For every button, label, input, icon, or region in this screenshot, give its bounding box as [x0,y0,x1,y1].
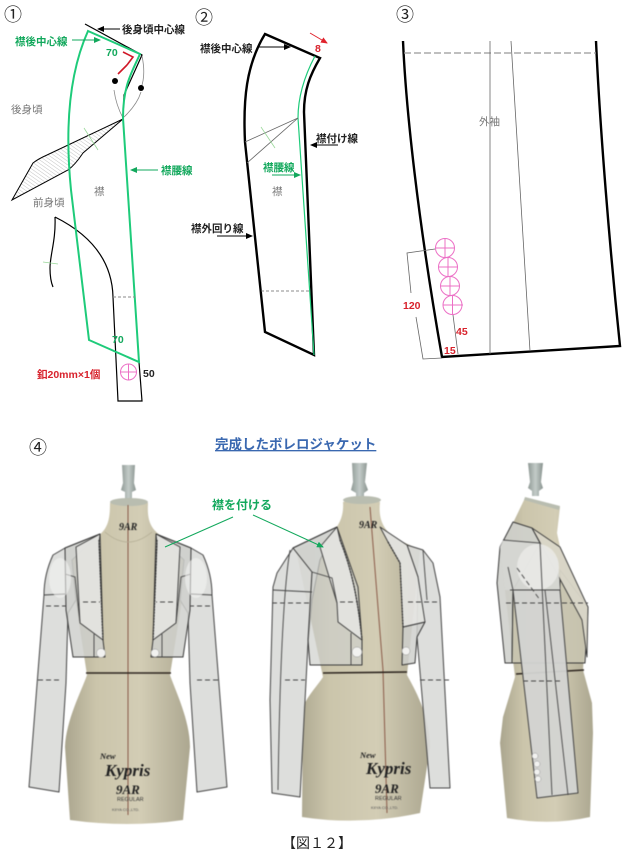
green arrows [165,515,323,547]
mannequin three-quarter [270,463,450,821]
dimension 70: 70 [106,47,118,59]
waist tape [323,672,407,673]
collar outline [244,34,320,355]
heading: finished bolero jacket: 完成したボレロジャケット [215,436,376,452]
arrow [72,39,100,41]
label: back bodice: 後身頃 [11,103,43,116]
arrow [272,174,300,176]
sleeve left [270,527,337,797]
dimension 50: 50 [143,368,155,380]
caption: 【図１２】 [282,835,352,851]
notch dots [112,78,144,91]
grain and seam lines [490,41,530,354]
dress form [296,499,430,821]
stand [121,465,136,500]
button mark [120,364,137,380]
panel 3: outer sleeve pattern [396,5,620,359]
lapel right [380,527,425,627]
label: attach collar: 襟を付ける [212,497,272,512]
sleeve right [407,545,450,788]
arrow [131,169,158,171]
arrow [217,235,252,237]
dimension 45: 45 [456,326,468,338]
jacket left body [293,527,362,665]
waist tape [86,672,171,674]
arrow [98,28,120,30]
brand text [359,520,412,810]
label: front bodice: 前身頃 [33,196,65,209]
dress form [65,500,190,824]
number 1: ① [4,5,22,25]
stand [528,463,543,496]
dashed cap line [404,52,596,54]
sleeve buttons [532,753,541,782]
brand text: 9AR [116,782,140,797]
jacket front body [512,570,588,663]
lapel dotted edge [388,542,403,627]
button marks [435,238,463,315]
panel 1: collar draft on bodice [4,5,193,401]
grain tick [261,127,275,148]
label: collar waist line: 襟腰線 [263,161,295,174]
collar waist line [298,56,315,355]
jacket left [29,534,106,792]
label: collar: 襟 [272,186,283,198]
brand text: REGULAR [117,797,144,803]
label: outer collar line: 襟外回り線 [191,222,244,235]
dimension 8: 8 [315,43,321,55]
dart [12,119,123,200]
centre line [127,505,129,815]
neck and armhole curves [50,217,142,401]
brand text: Kypris [365,759,412,778]
label: back centre line: 後身頃中心線 [122,23,185,36]
brand text: 9AR [119,522,138,533]
panel 2: collar pattern [191,8,358,355]
seam lines [273,550,427,790]
arrow [257,46,290,48]
dimension bracket [407,249,458,359]
stand [351,463,368,500]
dash lines [506,568,588,681]
jacket right body [402,622,425,665]
number 2: ② [195,8,213,28]
grain ticks [43,128,98,264]
label: collar back centre: 襟後中心線 [200,42,253,55]
waist tape [516,670,584,674]
buttons [352,647,410,657]
brand text: 9AR [375,781,399,796]
7mm red mark [118,52,133,74]
brand text: KIIYA CO.,LTD. [371,805,398,810]
jacket right (mirrored) [151,534,227,792]
brand text: Kypris [104,761,151,780]
jacket back body [497,522,540,663]
brand text [99,522,151,812]
sleeve cap [500,540,560,590]
dart lines [245,118,298,163]
sleeve details [503,540,568,795]
brand text: New [359,750,376,760]
neck base curve [105,532,152,542]
label: collar waist line: 襟腰線 [161,164,193,177]
arrow [311,144,338,146]
collar outline in green [68,31,140,362]
brand text: REGULAR [375,796,402,802]
mannequin side [497,463,593,822]
lapel [532,528,588,657]
dress form [500,498,593,822]
centre line [370,507,387,813]
lapel dotted edge [340,540,362,640]
label: outer sleeve: 外袖 [479,115,500,128]
dashed fold [113,296,135,298]
dashed fold [261,290,310,292]
label: collar: 襟 [94,186,105,198]
lapel left [320,527,362,640]
top disc [110,498,148,506]
label: collar back centre: 襟後中心線 [15,35,68,48]
label: button: 釦20mm×1個 [37,368,100,381]
brand text: KIIYA CO.,LTD. [112,807,139,812]
dimension 15: 15 [444,345,456,357]
back centre line [85,24,142,118]
brand text: New [99,751,116,761]
top disc [343,496,381,504]
sleeve lower [513,590,578,798]
brand text: 9AR [359,520,378,531]
panel 4 heading: number: ④ [29,438,47,458]
construction arcs [114,56,144,118]
sleeve outline [403,41,620,357]
top disc [524,497,560,510]
dimension 120: 120 [403,300,421,312]
label: collar attach line: 襟付け線 [316,132,358,145]
number 3: ③ [396,5,414,25]
sleeve cap highlight [517,544,559,590]
red arrow [310,33,327,43]
mannequin front [29,465,227,824]
dimension 70 lower: 70 [112,334,124,346]
jacket details [272,602,450,680]
